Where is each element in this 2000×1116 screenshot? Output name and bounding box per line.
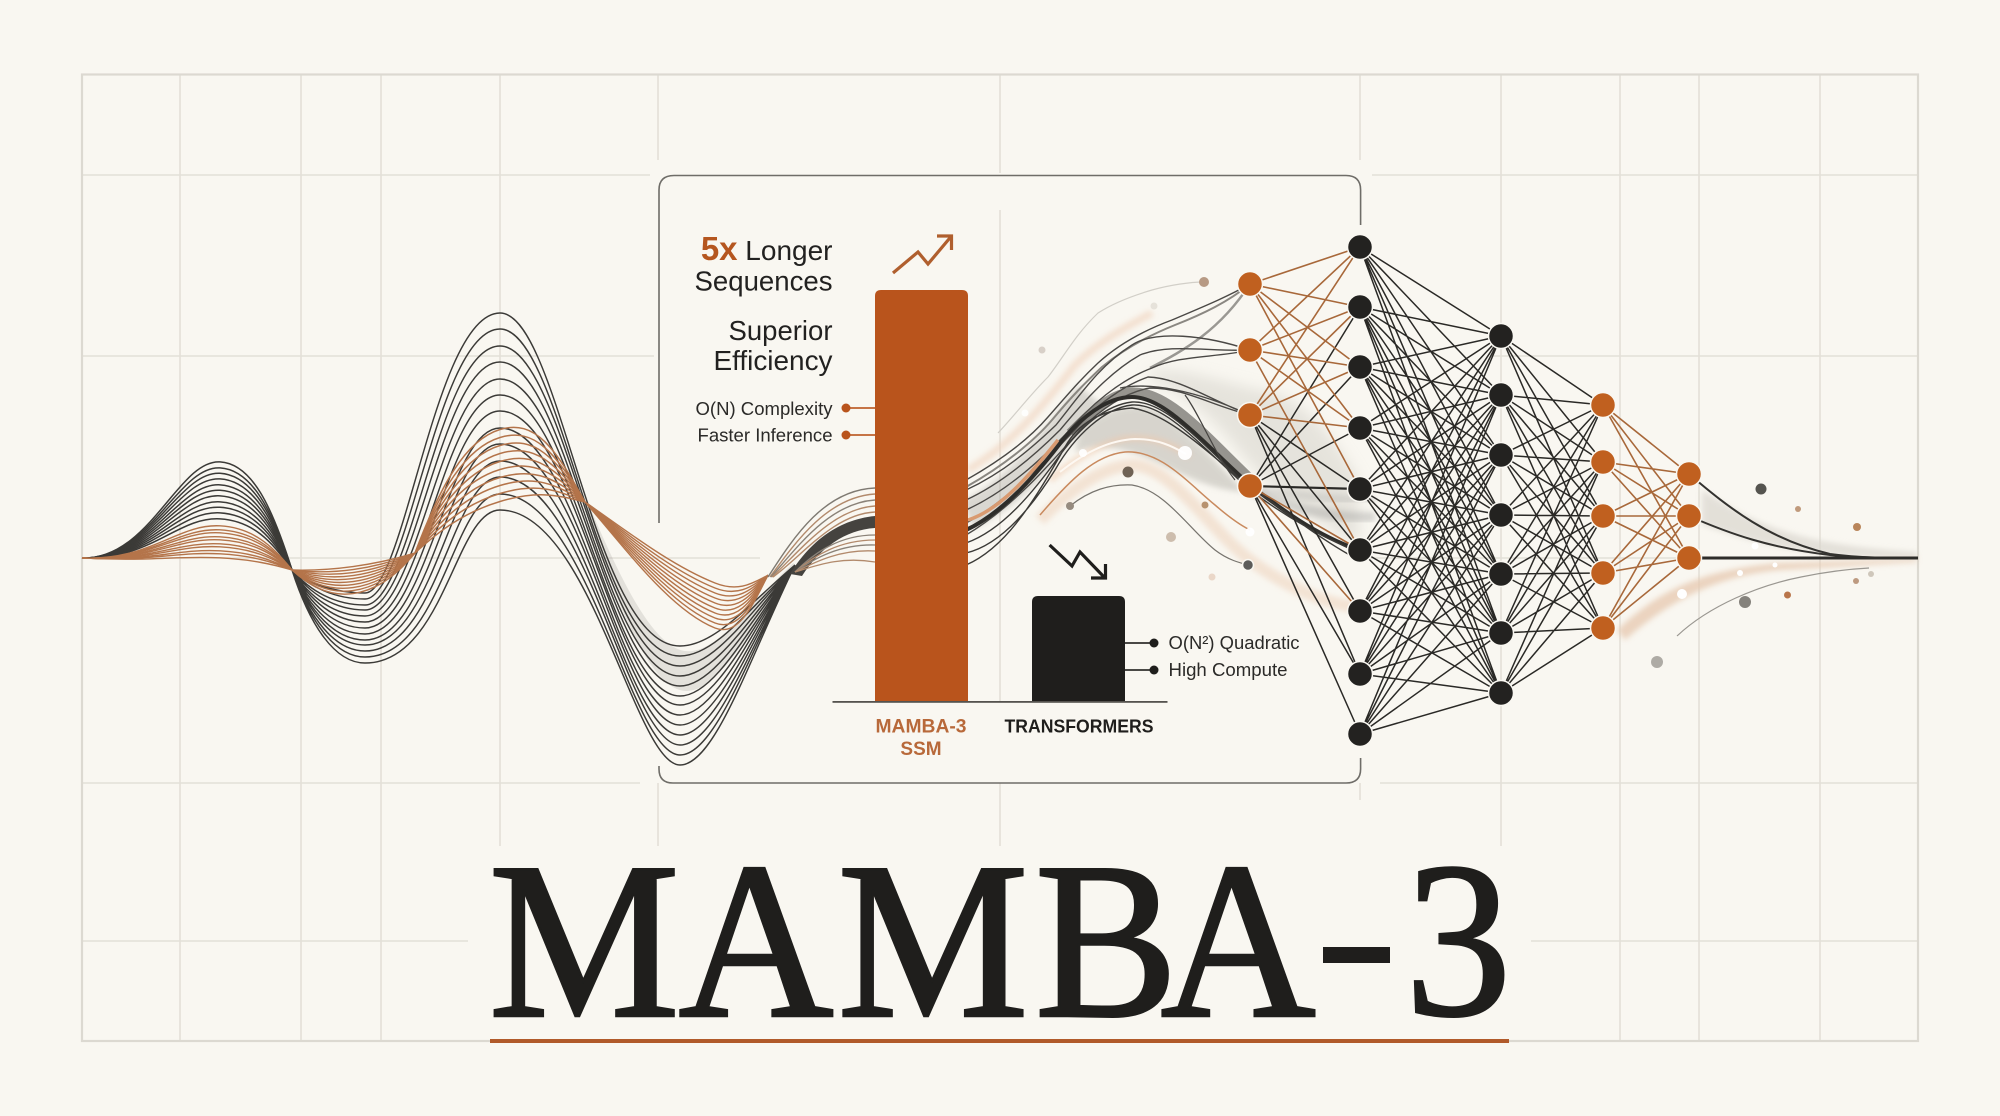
hidden layer 1 nodes (1348, 234, 1372, 746)
edges layer 1 to 2 black (1250, 307, 1360, 734)
tail lines (1689, 474, 1918, 558)
bar chart (832, 290, 1168, 760)
thin strand to grey dot (1070, 485, 1249, 565)
callout: quadratic: O(N²) Quadratic (1168, 632, 1300, 653)
wave lobe 2 orange (292, 553, 415, 602)
fan entering bar: lower strands (795, 535, 875, 572)
orange strand inside bundle (968, 440, 1058, 520)
lower strands (966, 402, 1359, 565)
bundle grey wash (968, 395, 1090, 515)
strands to node 1 (966, 284, 1250, 480)
title: - (1328, 847, 1382, 1034)
tail orange wash (1617, 559, 1917, 640)
grey thick strand to node 1 (1150, 284, 1250, 368)
grey band past the orange node (1250, 490, 1375, 517)
edges layer 3 to 4 (1501, 336, 1603, 693)
chart baseline (832, 701, 1168, 703)
strands to node 3 (966, 377, 1250, 535)
stat: 5x longer sequences: 5x Longer (701, 230, 832, 267)
callout: faster inference: Faster Inference (698, 424, 832, 446)
hidden layer 2 nodes (1488, 324, 1514, 706)
second grey band past the orange node (1250, 488, 1375, 500)
stat: superior: Superior (728, 315, 832, 346)
efficiency line: Efficiency (714, 345, 832, 376)
wave: sequence signal lines (82, 313, 875, 765)
label: Mamba-3 SSM: SSM (900, 739, 942, 760)
background grid (82, 74, 1918, 1041)
title: 3 (1405, 818, 1512, 1063)
edges layer 4 to 5 (1603, 405, 1689, 628)
fan entering bar: upper strands (768, 488, 875, 577)
flow from bars into the network (966, 282, 1375, 607)
faint top strand (998, 282, 1204, 433)
tail: output signal (1617, 474, 1918, 668)
grey wash under arch (1075, 407, 1245, 492)
grey wash right of node (1150, 370, 1359, 545)
main dark strand (966, 397, 1359, 550)
upper tan wash (968, 313, 1152, 470)
edges layer 2 to 3 (1360, 247, 1501, 734)
strands to node 2 (966, 336, 1250, 510)
wave lobe 3 orange (415, 404, 585, 553)
dark band over main strand (1070, 392, 1250, 478)
second strand to node 1 (966, 284, 1250, 487)
Transformer callouts (1125, 632, 1300, 680)
label: Mamba-3 SSM: MAMBA-3 (876, 716, 966, 738)
sequences line: Sequences (694, 266, 832, 296)
headline stats (694, 230, 832, 376)
comparison panel frame (659, 176, 1361, 783)
orange soft strand (1040, 452, 1250, 530)
lower orange wash (1040, 465, 1360, 607)
bar: Transformers (1032, 596, 1125, 702)
title: MAMBA (489, 817, 1316, 1065)
input layer nodes (1238, 272, 1262, 498)
edges layer 1 to 2 orange (1250, 247, 1360, 611)
wave lobe 1 black (82, 454, 292, 570)
callout: high compute: High Compute (1168, 659, 1288, 680)
bar: Mamba-3 (875, 290, 968, 702)
tail grey wash (1702, 490, 1917, 558)
tail particles (1651, 484, 1874, 668)
floating particles centre (1022, 277, 1254, 580)
callout: O(N) complexity: O(N) Complexity (696, 398, 833, 419)
wave continuous black strands (292, 313, 795, 765)
title underline (490, 1039, 1509, 1043)
output layer nodes (1676, 462, 1702, 570)
label: Transformers: TRANSFORMERS (1004, 716, 1154, 736)
title hyphen bar (1323, 947, 1390, 963)
wave lobe 4 orange (585, 502, 768, 649)
neural network (1238, 234, 1702, 746)
trend up arrow (893, 236, 952, 273)
highlight core (1060, 439, 1186, 472)
highlight wash (1050, 438, 1190, 480)
thick edge layer 1 to 2 (1250, 486, 1360, 489)
wave lobe 1 orange (82, 518, 292, 570)
thin dark strand (1185, 395, 1235, 480)
wave trough grey wash (585, 502, 795, 722)
Mamba callouts (696, 398, 875, 446)
trend down arrow (1050, 545, 1106, 578)
hidden layer 3 nodes (1590, 392, 1616, 640)
fan entering bar: dark band (790, 516, 875, 576)
